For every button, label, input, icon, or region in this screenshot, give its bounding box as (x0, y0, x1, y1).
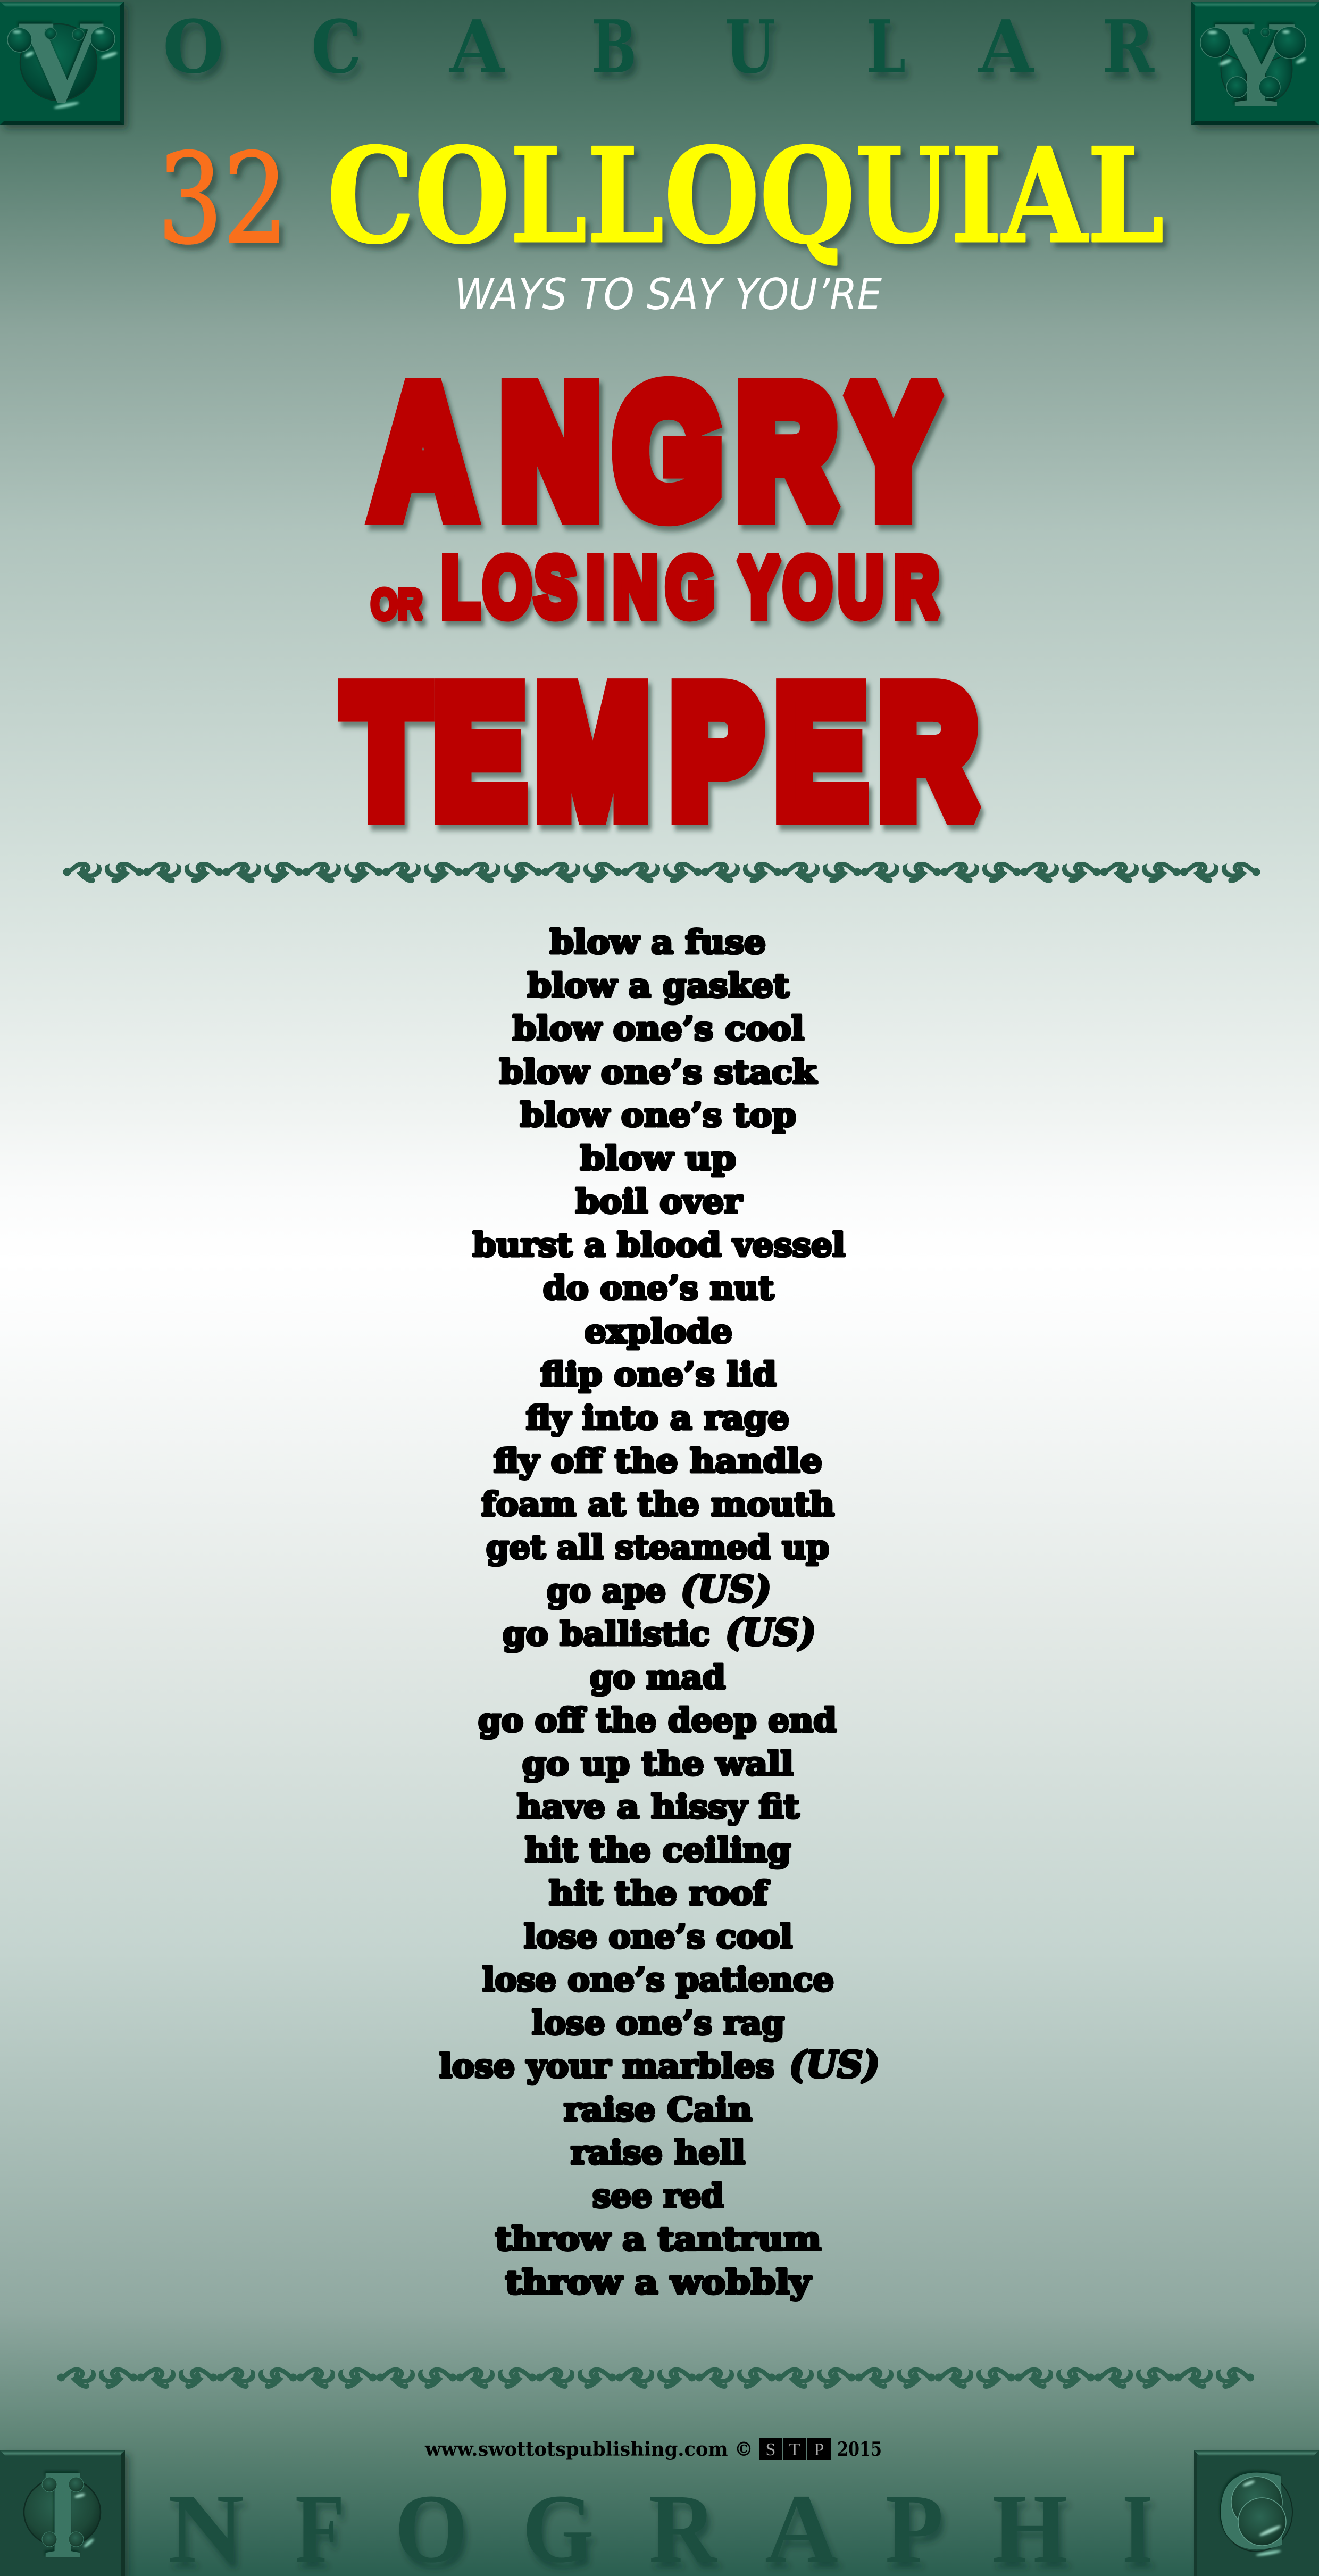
heading: OCABULAR letters: R (1102, 4, 1155, 90)
phrase 19: go off the deep end (478, 1701, 837, 1740)
heading: OCABULAR letters: A (978, 4, 1034, 90)
heading: OCABULAR letters: B (591, 4, 637, 90)
phrase 29: raise hell (571, 2134, 745, 2172)
headline: LOSING YOUR: LOSING YOUR (441, 541, 939, 634)
phrase 16: (US) (681, 1568, 771, 1611)
phrase 22: hit the ceiling (525, 1831, 791, 1869)
phrase 8: burst a blood vessel (473, 1226, 845, 1264)
phrase 27 (439, 2044, 880, 2087)
phrase 24: lose one’s cool (524, 1918, 792, 1956)
tile: letter V (0, 0, 124, 127)
phrase 28: raise Cain (564, 2091, 752, 2129)
phrase 3: blow one’s cool (513, 1010, 804, 1048)
phrase 12: fly into a rage (526, 1399, 789, 1437)
tile: letter C (1194, 2446, 1319, 2576)
phrase 5: blow one’s top (520, 1096, 796, 1134)
number 32: 32 (157, 127, 288, 271)
tile: letter C: C (1216, 2446, 1290, 2573)
phrase 21: have a hissy fit (517, 1788, 799, 1826)
headline: OR: OR (371, 580, 422, 628)
phrase list (439, 924, 880, 2301)
word COLLOQUIAL: COLLOQUIAL (327, 119, 1164, 272)
phrase 10: explode (585, 1312, 732, 1350)
ornament divider: top (63, 862, 1260, 883)
STP logo boxes: S (766, 2440, 775, 2459)
STP logo boxes: T (789, 2440, 800, 2459)
phrase 2: blow a gasket (528, 967, 789, 1004)
phrase 26: lose one’s rag (532, 2004, 784, 2042)
phrase 27: (US) (789, 2044, 880, 2087)
heading: OCABULAR letters: U (725, 4, 775, 90)
phrase 31: throw a tantrum (495, 2221, 821, 2258)
phrase 17: go ballistic (503, 1615, 710, 1653)
heading: NFOGRAPHI letters (168, 2474, 1153, 2576)
phrase 13: fly off the handle (494, 1442, 822, 1480)
phrase 17: (US) (725, 1611, 816, 1654)
ornament divider: bottom (57, 2367, 1254, 2389)
phrase 4: blow one’s stack (499, 1053, 817, 1091)
phrase 27: lose your marbles (439, 2047, 774, 2085)
headline: TEMPER: TEMPER (345, 652, 976, 852)
title: 32 COLLOQUIAL (157, 119, 1164, 272)
phrase 25: lose one’s patience (482, 1961, 834, 1999)
footer credit (424, 2438, 882, 2461)
year: 2015 (837, 2438, 882, 2461)
website and copyright: www.swottotspublishing.com © (424, 2438, 753, 2461)
phrase 1: blow a fuse (550, 924, 766, 961)
tile: letter V: V (18, 0, 105, 127)
heading: OCABULAR letters: A (448, 4, 505, 90)
phrase 15: get all steamed up (486, 1529, 829, 1566)
phrase 9: do one’s nut (543, 1269, 774, 1307)
phrase 11: flip one’s lid (540, 1356, 777, 1394)
phrase 14: foam at the mouth (481, 1485, 834, 1523)
phrase 16 (547, 1568, 771, 1611)
phrase 30: see red (592, 2177, 724, 2215)
heading: OCABULAR letters: C (311, 4, 362, 90)
phrase 7: boil over (575, 1183, 742, 1220)
tile: letter I (0, 2443, 125, 2576)
phrase 17 (503, 1611, 816, 1654)
phrase 32: throw a wobbly (505, 2264, 812, 2301)
heading: OCABULAR letters: L (866, 4, 906, 90)
phrase 20: go up the wall (522, 1745, 794, 1783)
heading: OCABULAR letters: O (163, 4, 224, 90)
phrase 23: hit the roof (549, 1875, 770, 1912)
heading: OCABULAR letters (163, 4, 1155, 90)
phrase 6: blow up (580, 1140, 736, 1177)
headline: ANGRY: ANGRY (374, 351, 939, 551)
phrase 16: go ape (547, 1572, 666, 1610)
phrase 18: go mad (590, 1658, 725, 1696)
subtitle: WAYS TO SAY YOU’RE (455, 270, 882, 319)
STP logo boxes: P (814, 2440, 824, 2459)
STP logo boxes (759, 2438, 831, 2460)
